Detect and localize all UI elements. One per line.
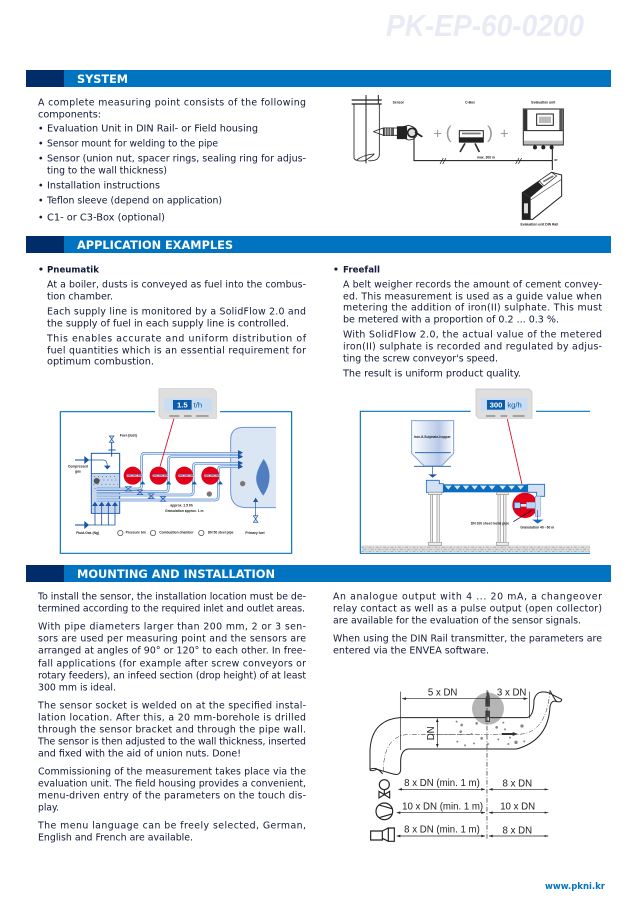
text block: installation instructions: The sensor socket is welded on at the specified instal- [37, 700, 306, 712]
text block: freefall: The result is uniform product quality. [342, 368, 521, 380]
text block: freefall: ting the screw conveyor's speed. [343, 354, 498, 364]
text block: installation instructions: sors are used per measuring point and the sensors are [38, 634, 306, 644]
text block: pneumatik [38, 264, 307, 368]
text block: system components: • [38, 180, 44, 192]
text block: installation instructions: evaluation unit. The field housing provides a convenient, [38, 778, 306, 790]
text block: installation instructions: and fixed with the aid of union nuts. Done! [38, 748, 241, 760]
flow arrow [502, 731, 513, 737]
diagram: screw conveyor: DN 100 sheet metal pipe [471, 522, 509, 526]
text block: outputs and software: An analogue output with 4 ... 20 mA, a changeover [333, 592, 602, 602]
dimension labels: 8 x DN (min. 1 m) [404, 778, 480, 789]
text block: installation instructions: menu-driven entry of the parameters on the touch dis- [38, 790, 306, 802]
diagram: system overview [352, 95, 563, 227]
text block: system components: Evaluation Unit in DIN Rail- or Field housing [47, 124, 258, 134]
diagram: pneumatic conveying [60, 389, 292, 553]
diagram: pneumatic conveying: Primary fuel [245, 531, 265, 535]
text block: system components: • [38, 154, 44, 164]
text block: pneumatik: tion chamber. [47, 292, 113, 302]
plus and brackets [433, 123, 509, 143]
text block: system components: A complete measuring point consists of the following [38, 98, 306, 108]
diagram: pneumatic conveying: approx. 1.5 t/h [170, 504, 193, 508]
text block: pneumatik: At a boiler, dusts is conveyed as fuel into the combus- [47, 280, 306, 290]
evaluation unit [523, 109, 563, 149]
text block: freefall: Freefall [343, 264, 380, 276]
combustion chamber [231, 427, 276, 508]
text block: pneumatik: Each supply line is monitored by a SolidFlow 2.0 and [47, 306, 306, 318]
text block: pneumatik: Pneumatik [47, 264, 100, 276]
text block: installation instructions: The sensor is then adjusted to the wall thickness, inserted [37, 736, 306, 748]
dimension labels: 8 x DN [503, 826, 532, 837]
text block: freefall: metering the addition of iron(II) sulphate. This must [343, 302, 602, 314]
text block: system components: • [38, 138, 44, 150]
footer: website: www.pkni.kr [545, 882, 606, 892]
diagram: system overview: Evaluation unit [531, 101, 556, 105]
text block: installation instructions: The menu language can be freely selected, German, [37, 820, 306, 832]
gravel floor [361, 545, 590, 553]
diagram: pneumatic conveying: Fuel (dust) [120, 434, 137, 438]
sensor [485, 691, 490, 722]
text block: installation instructions: lation location. After this, a 20 mm-borehole is drilled [38, 712, 306, 724]
text block: freefall: iron(II) sulphate is recorded and regulated by adjus- [343, 342, 602, 352]
text block: system components: • [38, 124, 44, 134]
diagram: pneumatic conveying: Combustion chamber [159, 531, 194, 535]
diagram: system overview: or [554, 158, 558, 162]
diagram: pneumatic conveying: Fluid-Gas (Ng) [76, 531, 99, 535]
dimension labels: 8 x DN (min. 1 m) [404, 825, 480, 836]
text block: installation instructions: With pipe diameters larger than 200 mm, 2 or 3 sen- [38, 622, 306, 632]
conveying pipes [97, 453, 242, 500]
icon: nozzle [371, 828, 394, 841]
plus and brackets: + [433, 127, 442, 143]
text block: system components: • [38, 212, 44, 224]
dimension labels: DN [426, 726, 437, 740]
text block: installation instructions: 300 mm is ideal. [38, 682, 116, 694]
text block: pneumatik: This enables accurate and uniform distribution of [46, 334, 307, 344]
diagram: pneumatic conveying: Compressed [68, 465, 88, 469]
screw conveyor [426, 480, 545, 496]
C-box [459, 131, 483, 152]
text block: system components: C1- or C3-Box (optional) [47, 212, 165, 224]
text block: system components: Installation instructions [47, 180, 160, 192]
text block: installation instructions: To install the sensor, the installation location must be de- [37, 592, 306, 602]
text block: freefall [333, 264, 602, 380]
text block: installation instructions: English and French are available. [38, 832, 193, 844]
text block: installation instructions: termined according to the required inlet and outlet areas. [38, 604, 305, 614]
heading: mounting and installation: MOUNTING AND INSTALLATION [77, 568, 275, 581]
text block: freefall: be metered with a proportion of 0.2 ... 0.3 %. [343, 314, 559, 326]
text block: system components: components: [38, 110, 101, 120]
diagram: screw conveyor: Iron-II-Sulphate-hopper [414, 435, 451, 439]
display 1.5 t/h [159, 389, 216, 467]
text block: installation instructions: fall applications (for example after screw conveyors or [38, 658, 306, 670]
red sensor [512, 493, 543, 524]
text block: outputs and software: entered via the ENVEA software. [333, 646, 489, 656]
diagram: system overview: max. 300 m [477, 156, 495, 160]
dimension labels: 8 x DN [503, 779, 532, 790]
diagram: system overview: Evaluation unit DIN Rail [521, 223, 558, 227]
icon: valve [379, 780, 390, 798]
DIN rail unit [522, 172, 562, 219]
text block: freefall: With SolidFlow 2.0, the actual value of the metered [343, 330, 602, 340]
text block: freefall: A belt weigher records the amount of cement convey- [343, 280, 602, 290]
red sensors [124, 467, 223, 485]
particles [456, 721, 525, 746]
dimension labels: 10 x DN (min. 1 m) [402, 802, 483, 813]
text block: installation instructions: Commissioning of the measurement takes place via the [38, 766, 306, 778]
text block: installation instructions [37, 592, 306, 844]
text block: outputs and software [333, 592, 602, 656]
valves and arrows [75, 436, 258, 528]
text block: system components: ting to the wall thickness) [47, 166, 167, 176]
dimension lines [397, 690, 548, 840]
text block: pneumatik: fuel quantities which is an essential requirement for [47, 346, 306, 356]
display 1.5 t/h: 1.5 [177, 401, 188, 410]
dimension labels [402, 688, 535, 837]
text block: pneumatik: optimum combustion. [47, 356, 154, 368]
supports [428, 492, 508, 545]
display 300 kg/h [476, 389, 532, 484]
text block: installation instructions: arranged at angles of 90° or 120° to each other. In free- [38, 646, 306, 656]
text block: outputs and software: When using the DIN Rail transmitter, the parameters are [333, 634, 602, 644]
plus and brackets: ) [487, 123, 493, 143]
diagram: pneumatic conveying: Granulation approx. 1 m [165, 509, 204, 513]
icon: pump [376, 803, 393, 820]
diagram: pneumatic conveying: Pressure bin [126, 531, 146, 535]
pipe with sensor [352, 95, 423, 163]
diagram: screw conveyor: Granulation 40 - 60 m [520, 526, 554, 530]
text block: system components: Sensor (union nut, spacer rings, sealing ring for adjus- [47, 154, 306, 164]
diagram: pneumatic conveying: gas [75, 470, 81, 474]
text block: installation instructions: through the sensor bracket and through the pipe wall. [38, 724, 306, 736]
diagram: pipe inlet and outlet distances [370, 688, 562, 841]
heading: system [26, 70, 611, 87]
display 1.5 t/h: t/h [194, 401, 202, 410]
text block: installation instructions: play. [38, 802, 59, 814]
heading: system: SYSTEM [77, 73, 128, 86]
cable connection [414, 137, 552, 170]
text block: outputs and software: relay contact as well as a pulse output (open collector) [333, 604, 602, 614]
diagram: screw conveyor [360, 389, 590, 553]
text block: freefall: ed. This measurement is used as a guide value when [343, 292, 602, 302]
pipe [370, 690, 562, 774]
text block: pneumatik: the supply of fuel in each supply line is controlled. [47, 318, 289, 330]
diagram: pneumatic conveying: DN 50 steel pipe [208, 531, 234, 535]
text block: installation instructions: rotary feeders), an infeed section (drop height) of at least [38, 670, 306, 682]
diagram: system overview: C-Box [465, 101, 475, 105]
dimension labels: 10 x DN [500, 802, 535, 813]
dimension labels: 3 x DN [497, 688, 526, 699]
title: document code: PK-EP-60-0200 [386, 8, 584, 43]
text block: system components [38, 98, 306, 224]
heading: application examples [26, 236, 611, 253]
text block: system components: • [38, 196, 44, 206]
plus and brackets: + [500, 127, 509, 143]
text block: system components: Sensor mount for welding to the pipe [47, 138, 218, 150]
sensor highlight [472, 693, 504, 725]
display 300 kg/h: kg/h [507, 401, 522, 410]
pressure bin [91, 453, 120, 513]
text block: outputs and software: are available for the evaluation of the sensor signals. [333, 616, 581, 626]
plus and brackets: ( [446, 123, 452, 143]
text block: pneumatik: • [38, 264, 44, 276]
text block: freefall: • [333, 264, 339, 276]
heading: mounting and installation [26, 565, 611, 582]
dimension labels: 5 x DN [428, 688, 457, 699]
diagram: system overview: Sensor [393, 101, 405, 105]
heading: application examples: APPLICATION EXAMPLES [77, 239, 233, 252]
display 300 kg/h: 300 [490, 401, 502, 410]
text block: system components: Teflon sleeve (depend on application) [46, 196, 222, 206]
